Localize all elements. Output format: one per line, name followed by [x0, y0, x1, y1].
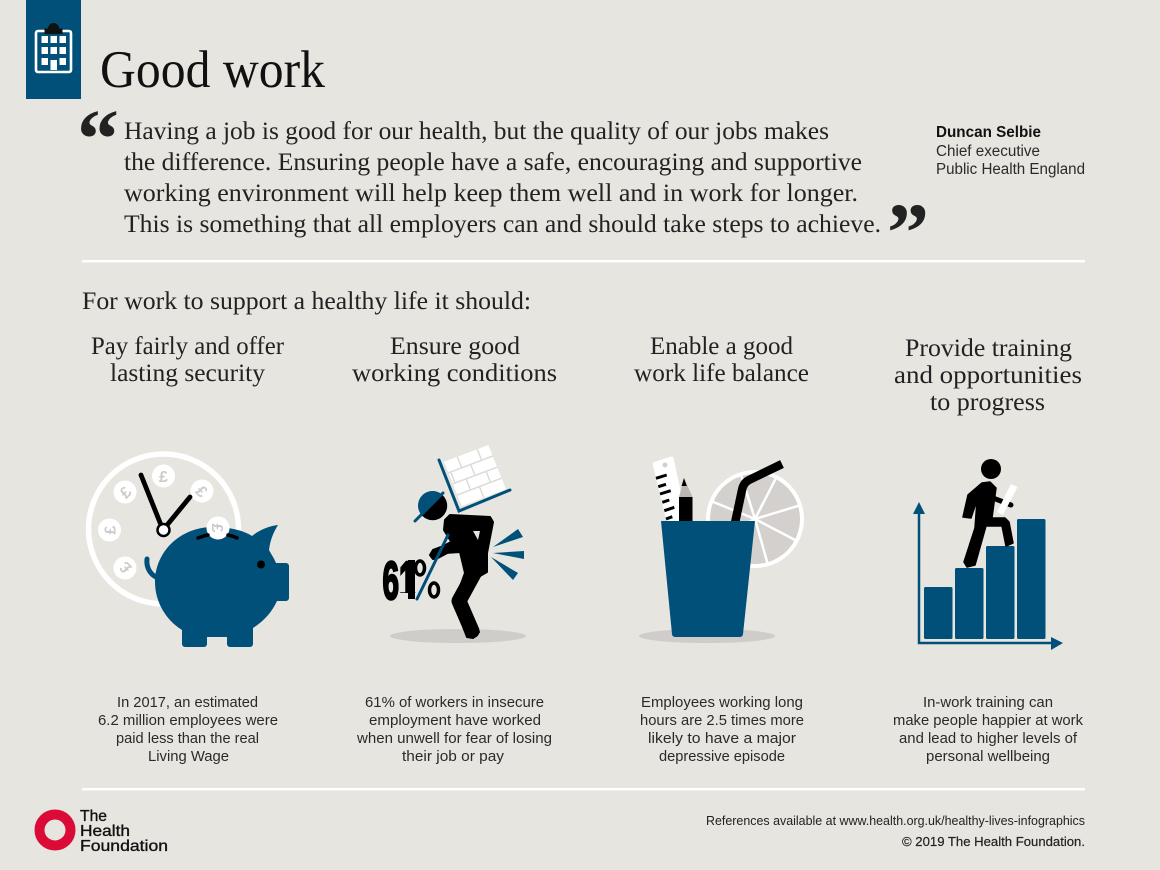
- icon: clock and piggy bank: £: [192, 483, 210, 501]
- heading: training: to progress: [930, 389, 1045, 416]
- heading: conditions: Ensure good: [390, 333, 521, 360]
- opening quote mark: “: [77, 93, 119, 186]
- heading: pay: [91, 333, 285, 387]
- caption: pay: [98, 694, 278, 765]
- icon: clock and piggy bank: [88, 454, 289, 647]
- icon: office building: [26, 0, 81, 99]
- logo: The Health Foundation: [40, 808, 168, 855]
- stat: 61 percent: 61: [382, 552, 416, 611]
- footer references: © 2019 The Health Foundation.: [902, 834, 1085, 849]
- caption: conditions: their job or pay: [402, 748, 505, 765]
- heading: conditions: [352, 333, 557, 387]
- stat: 61 percent: [382, 552, 438, 611]
- closing quote mark: ”: [887, 187, 929, 280]
- panel: training: [893, 335, 1083, 765]
- quote text: Having a job is good for our health, but the quality of our jobs makes: [124, 118, 829, 145]
- attribution: Duncan Selbie: [936, 124, 1041, 141]
- icon: clock and piggy bank: £: [102, 525, 120, 534]
- heading: balance: Enable a good: [650, 333, 793, 360]
- panel: working conditions: [352, 333, 557, 765]
- heading: pay: lasting security: [110, 360, 265, 387]
- caption: training: make people happier at work: [893, 712, 1083, 729]
- caption: balance: depressive episode: [659, 748, 785, 765]
- caption: conditions: [356, 694, 552, 765]
- logo: The Health Foundation: The: [80, 808, 107, 825]
- icon: worker carrying bricks: [382, 445, 526, 643]
- icon: clock and piggy bank: £: [208, 524, 225, 533]
- footer references: References available at www.health.org.uk/healthy-lives-infographics: [706, 813, 1085, 828]
- quote text: the difference. Ensuring people have a safe, encouraging and supportive: [124, 149, 862, 176]
- icon: person climbing bar chart: [913, 459, 1063, 650]
- attribution: Public Health England: [936, 161, 1085, 178]
- icon: clock and piggy bank: £: [117, 558, 135, 576]
- caption: balance: [640, 694, 804, 765]
- heading: balance: [634, 333, 809, 387]
- caption: training: personal wellbeing: [926, 748, 1050, 765]
- attribution: Chief executive: [936, 143, 1040, 160]
- caption: conditions: employment have worked: [369, 712, 541, 729]
- icon: cup with ruler, pencil, straw and lime: [639, 456, 804, 643]
- footer references: [706, 813, 1085, 849]
- heading: pay: Pay fairly and offer: [91, 333, 285, 360]
- logo: The Health Foundation: Health: [80, 823, 130, 840]
- icon: clock and piggy bank: £: [117, 484, 135, 502]
- caption: pay: Living Wage: [148, 748, 229, 765]
- heading: training: Provide training: [905, 335, 1073, 362]
- logo: The Health Foundation: Foundation: [80, 838, 168, 855]
- quote text: This is something that all employers can and should take steps to achieve.: [124, 211, 881, 238]
- caption: pay: 6.2 million employees were: [98, 712, 278, 729]
- caption: balance: hours are 2.5 times more: [640, 712, 804, 729]
- heading: balance: work life balance: [634, 360, 809, 387]
- panel: work life balance: [634, 333, 809, 765]
- caption: balance: Employees working long: [641, 694, 803, 711]
- caption: pay: paid less than the real: [116, 730, 259, 747]
- caption: conditions: when unwell for fear of losing: [356, 730, 552, 747]
- quote text: working environment will help keep them well and in work for longer.: [124, 180, 858, 207]
- caption: training: and lead to higher levels of: [899, 730, 1078, 747]
- heading: training: [894, 335, 1082, 416]
- caption: pay: In 2017, an estimated: [117, 694, 258, 711]
- section heading: For work to support a healthy life it should:: [82, 288, 531, 315]
- caption: conditions: 61% of workers in insecure: [365, 694, 544, 711]
- heading: training: and opportunities: [894, 362, 1082, 389]
- icon: clock and piggy bank: £: [159, 469, 168, 486]
- heading: conditions: working conditions: [352, 360, 557, 387]
- caption: training: In-work training can: [923, 694, 1053, 711]
- caption: training: [893, 694, 1083, 765]
- caption: balance: likely to have a major: [648, 730, 796, 747]
- title: Good work: [100, 41, 325, 99]
- attribution: [936, 124, 1085, 178]
- quote block: [77, 93, 1085, 280]
- panel: pay fairly: [88, 333, 289, 765]
- header block: [26, 0, 325, 99]
- quote text: [124, 118, 881, 238]
- icon: clock and piggy bank: £: [208, 524, 225, 533]
